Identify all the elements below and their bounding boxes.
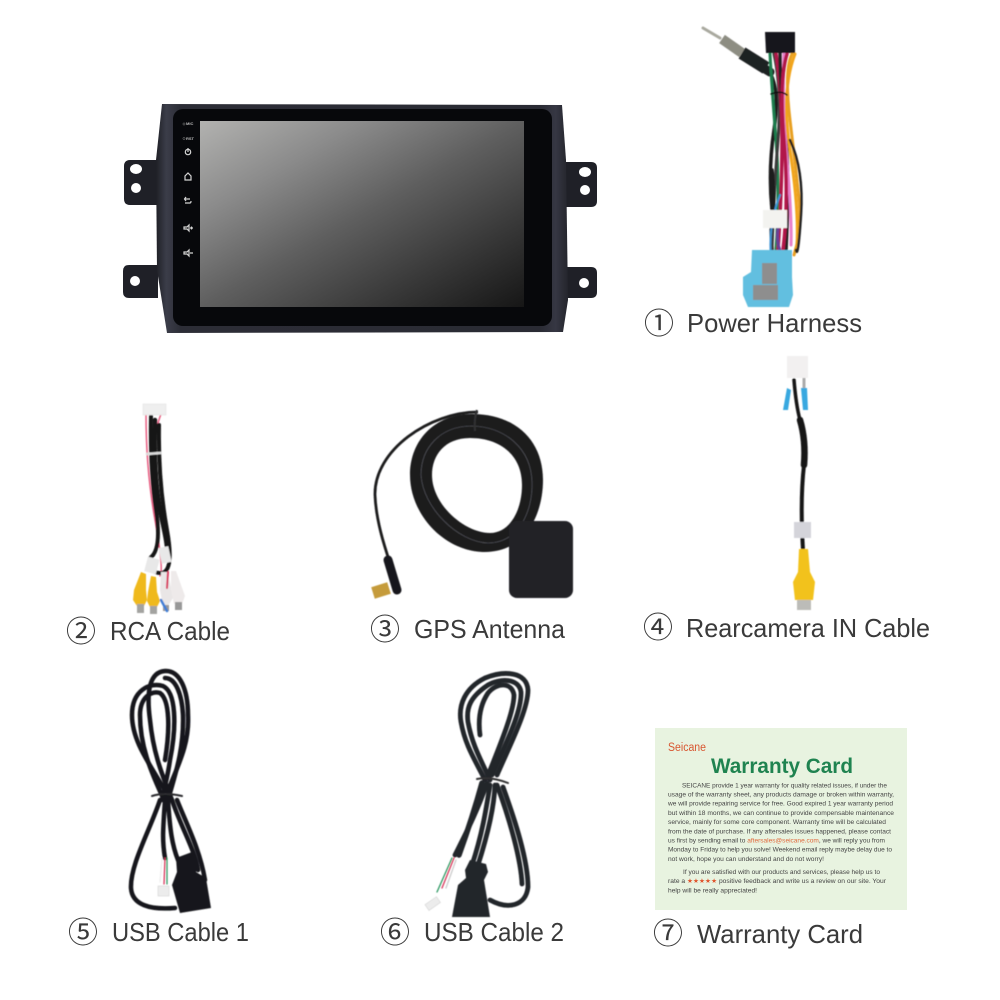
rca cable xyxy=(133,404,185,614)
warranty text xyxy=(667,782,894,894)
label: usb cable 2: ⑥ xyxy=(380,917,410,950)
usb cable 1 xyxy=(131,671,211,913)
usb plug xyxy=(172,852,211,913)
wire tag xyxy=(763,210,787,228)
warranty text: rate a ★★★★★ positive feedback and write us a review on our site. Your xyxy=(668,877,887,885)
card background xyxy=(655,728,907,910)
wires xyxy=(770,54,802,258)
label: gps antenna: GPS Antenna xyxy=(414,614,566,644)
warranty text: us first by sending email to aftersales@seicane.com, we will reply you from xyxy=(668,838,885,844)
connector xyxy=(787,356,808,378)
yellow plug xyxy=(793,549,815,610)
warranty text: Monday to Friday to help you solve! Weekend email reply maybe delay due to xyxy=(668,847,892,854)
usb cable 2 xyxy=(425,674,528,917)
label: warranty card: Warranty Card xyxy=(697,919,863,949)
screen xyxy=(200,121,524,307)
sma connector xyxy=(388,560,397,590)
head unit xyxy=(123,104,597,333)
warranty card xyxy=(655,728,907,910)
label: usb cable 1: USB Cable 1 xyxy=(112,917,249,947)
cable loops xyxy=(131,671,205,908)
label: power harness: ① xyxy=(644,308,674,341)
cable xyxy=(794,380,800,420)
cable tag xyxy=(794,522,811,538)
warranty text: help will be really appreciated! xyxy=(668,887,757,894)
warranty text: but within 18 months, we can continue to provide compensable maintenance xyxy=(668,810,894,817)
rearcamera cable xyxy=(783,356,815,610)
MIC and RST labels: RST xyxy=(186,136,195,141)
label: warranty card: ⑦ xyxy=(653,918,683,951)
warranty text: SEICANE provide 1 year warranty for quality related issues, if under the xyxy=(682,782,887,789)
gps antenna xyxy=(373,410,573,598)
cables xyxy=(146,414,170,576)
warranty text: we will provide repairing service for free. Good expired 1 year warranty period xyxy=(667,801,893,808)
antenna plug xyxy=(703,28,770,72)
socket xyxy=(765,32,795,53)
label: usb cable 1: ⑤ xyxy=(68,917,98,950)
bezel body xyxy=(156,104,568,333)
yellow plugs xyxy=(133,572,160,614)
label: usb cable 1 xyxy=(68,917,249,950)
label: rearcamera in cable: Rearcamera IN Cable xyxy=(686,613,930,643)
warranty text: from the date of purchase. If any aftersales issues happened, please contact xyxy=(668,828,891,835)
side buttons xyxy=(184,148,193,256)
black panel xyxy=(173,109,552,326)
antenna puck xyxy=(509,521,573,598)
label: rca cable xyxy=(66,616,230,649)
mounting brackets xyxy=(123,160,597,298)
label: power harness: Power Harness xyxy=(687,308,862,338)
bare wires xyxy=(437,858,456,892)
blue connector xyxy=(743,250,793,307)
warranty text: usage of the warranty sheet, any products damage or broken within warranty, xyxy=(668,792,894,798)
brand: Seicane xyxy=(668,742,706,754)
power harness xyxy=(703,28,802,307)
warranty text: If you are satisfied with our products and services, please help us to xyxy=(683,869,880,876)
warranty text: not work, hope you can understand and do not worry! xyxy=(668,856,824,863)
cable loops xyxy=(455,674,528,905)
label: rca cable: ② xyxy=(66,616,96,649)
label: rca cable: RCA Cable xyxy=(110,616,230,646)
label: gps antenna xyxy=(370,614,566,647)
bare wires xyxy=(160,858,167,884)
blue terminals xyxy=(783,388,808,410)
connector xyxy=(143,404,166,415)
MIC and RST labels: MIC xyxy=(186,121,193,126)
usb plug xyxy=(452,860,490,917)
warranty text: service, mainly for some core component. Warranty time will be calculated xyxy=(668,819,886,826)
card title: Warranty Card xyxy=(711,755,853,778)
label: gps antenna: ③ xyxy=(370,614,400,647)
label: rearcamera in cable: ④ xyxy=(643,612,673,645)
label: usb cable 2: USB Cable 2 xyxy=(424,917,564,947)
white plugs xyxy=(160,571,185,611)
tags xyxy=(144,546,172,574)
label: usb cable 2 xyxy=(380,917,564,950)
coiled cable xyxy=(375,412,543,563)
MIC and RST labels xyxy=(186,121,195,141)
